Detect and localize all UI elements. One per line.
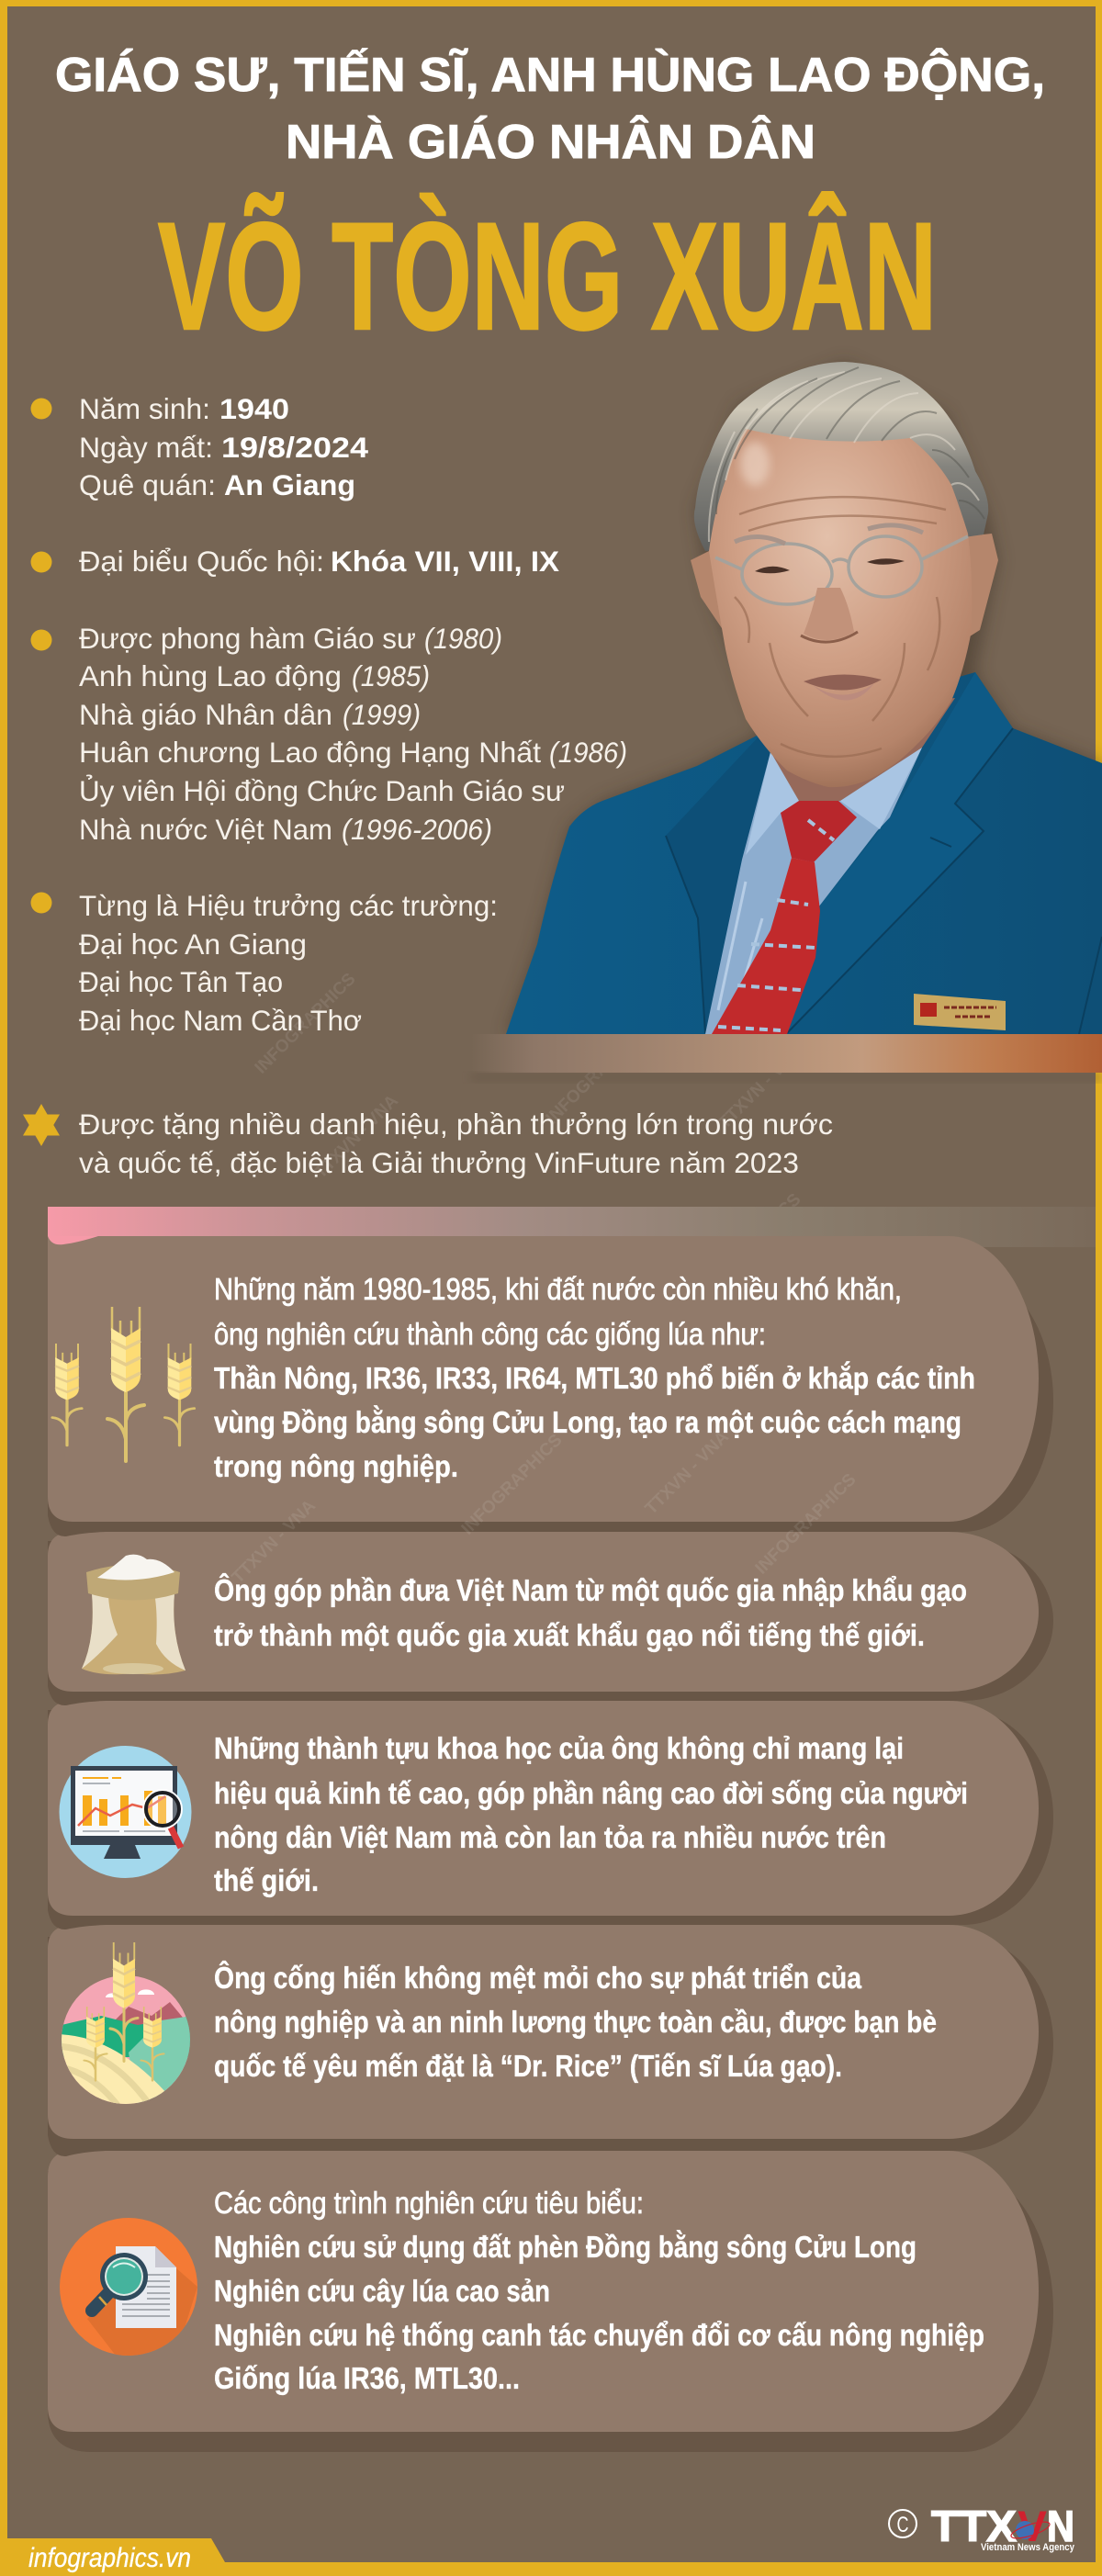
panel: rice export — [48, 1532, 1053, 1705]
text: rice varieties: Thần Nông, IR36, IR33, IR64, MTL30 phổ biến ở khắp các tỉnh — [214, 1361, 975, 1395]
bullet: rector roles: Đại học Tân Tạo — [79, 965, 283, 998]
text: research works — [214, 2186, 984, 2395]
glasses — [715, 536, 968, 604]
portrait photo — [506, 362, 1102, 1034]
hair strands — [709, 372, 979, 542]
bullet: personal details: 1940 — [219, 392, 289, 425]
bullet: titles and awards: Ủy viên Hội đồng Chức Danh Giáo sư — [79, 774, 565, 807]
text: rice export — [214, 1572, 967, 1652]
text: scientific achievements: nông dân Việt Nam mà còn lan tỏa ra nhiều nước trên — [214, 1820, 886, 1854]
text: research works: Giống lúa IR36, MTL30... — [214, 2361, 520, 2395]
bullet dot — [31, 399, 51, 419]
highlight: prizes: và quốc tế, đặc biệt là Giải thưởng VinFuture năm 2023 — [79, 1146, 799, 1179]
bullet: titles and awards: Nhà giáo Nhân dân — [79, 698, 332, 731]
logo: TTXVN: V — [1018, 2502, 1048, 2550]
text: rice varieties: Những năm 1980-1985, khi đất nước còn nhiều khó khăn, — [214, 1272, 902, 1306]
bullet: personal details: 19/8/2024 — [221, 431, 369, 464]
icon: star — [23, 1104, 60, 1146]
mouth — [804, 674, 882, 691]
bullet: national assembly: Khóa VII, VIII, IX — [331, 545, 559, 578]
bullet: rector roles: Đại học An Giang — [79, 928, 307, 961]
text: research works: Nghiên cứu sử dụng đất phèn Đồng bằng sông Cửu Long — [214, 2230, 916, 2264]
bullet: titles and awards: (1999) — [343, 698, 421, 731]
bullet: national assembly: Đại biểu Quốc hội: — [79, 545, 324, 578]
hair — [694, 362, 988, 551]
text: scientific achievements: thế giới. — [214, 1863, 319, 1897]
highlight: prizes: Được tặng nhiều danh hiệu, phần thưởng lớn trong nước — [79, 1108, 833, 1141]
watermarks over panels: TTXVN - VNA — [229, 1496, 320, 1588]
text: rice varieties: ông nghiên cứu thành công các giống lúa như: — [214, 1317, 766, 1351]
lapels — [666, 733, 770, 1034]
watermarks over panels: TTXVN - VNA — [642, 1427, 733, 1519]
text: research works: Nghiên cứu hệ thống canh tác chuyển đổi cơ cấu nông nghiệp — [214, 2318, 984, 2352]
text: Dr. Rice: quốc tế yêu mến đặt là “Dr. Rice” (Tiến sĩ Lúa gạo). — [214, 2049, 842, 2083]
name badge — [914, 994, 1006, 1030]
watermarks: TTXVN - VNA — [311, 1091, 402, 1183]
watermarks: TTXVN - VNA — [486, 1262, 577, 1354]
text: rice varieties: vùng Đồng bằng sông Cửu Long, tạo ra một cuộc cách mạng — [214, 1405, 961, 1439]
bullet: titles and awards: (1986) — [549, 736, 627, 769]
bullet: rector roles: Đại học Nam Cần Thơ — [79, 1004, 362, 1037]
icon: rice sack — [82, 1555, 186, 1674]
bullet: personal details: Ngày mất: — [79, 431, 213, 464]
logo: TTXVN — [889, 2502, 1075, 2553]
bullet: titles and awards: (1985) — [352, 659, 430, 692]
text: rice varieties — [214, 1272, 975, 1483]
footer tab: website: infographics.vn — [28, 2543, 191, 2573]
text: Dr. Rice: Ông cống hiến không mệt mỏi cho sự phát triển của — [214, 1960, 862, 1995]
watermarks: INFOGRAPHICS — [543, 1020, 651, 1129]
title: honorifics: GIÁO SƯ, TIẾN SĨ, ANH HÙNG LAO ĐỘNG, — [55, 48, 1045, 102]
watermarks: INFOGRAPHICS — [697, 1190, 805, 1299]
bullet: titles and awards: Huân chương Lao động Hạng Nhất — [79, 736, 541, 769]
bullet: titles and awards: Anh hùng Lao động — [79, 659, 342, 692]
nose — [804, 588, 854, 640]
bullet: personal details: An Giang — [224, 468, 355, 501]
photo shadow — [506, 362, 1102, 1034]
watermarks over panels: INFOGRAPHICS — [752, 1470, 860, 1579]
text: research works: Các công trình nghiên cứu tiêu biểu: — [214, 2186, 644, 2220]
bullet: personal details — [31, 392, 369, 501]
tie — [712, 801, 857, 1034]
text: research works: Nghiên cứu cây lúa cao sản — [214, 2274, 550, 2308]
icon: rice field — [55, 1942, 193, 2108]
pink ribbon — [48, 1207, 1096, 1247]
wrinkles and face shading — [735, 497, 946, 757]
shirt collar — [746, 748, 922, 855]
bullet: titles and awards: (1996-2006) — [342, 813, 492, 846]
neck — [772, 698, 955, 801]
bullet: titles and awards: Được phong hàm Giáo sư — [79, 622, 416, 655]
text: Dr. Rice — [214, 1960, 937, 2083]
bullet: titles and awards: (1980) — [424, 622, 502, 655]
bullet: personal details: Năm sinh: — [79, 392, 210, 425]
gradient band under portrait — [471, 1034, 1102, 1082]
bullet: titles and awards — [31, 622, 627, 846]
footer tab: website — [0, 2538, 1096, 2576]
text: Dr. Rice: nông nghiệp và an ninh lương thực toàn cầu, được bạn bè — [214, 2005, 937, 2039]
bullet dot — [31, 551, 51, 573]
text: rice varieties: trong nông nghiệp. — [214, 1449, 458, 1483]
ears — [691, 534, 998, 643]
globe — [1009, 2518, 1051, 2542]
eyebrows — [735, 525, 923, 544]
bullet dot — [31, 630, 51, 650]
icon: document and magnifier — [60, 2218, 197, 2360]
eyes — [755, 558, 905, 573]
watermarks — [252, 970, 806, 1354]
text: scientific achievements: hiệu quả kinh tế cao, góp phần nâng cao đời sống của người — [214, 1776, 968, 1810]
bullet: rector roles — [31, 889, 498, 1037]
logo: TTXVN: N — [1047, 2502, 1074, 2550]
panel: rice varieties — [48, 1231, 1053, 1536]
bullet: personal details: Quê quán: — [79, 468, 216, 501]
panel: Dr. Rice — [48, 1925, 1053, 2156]
forehead highlight — [740, 442, 770, 486]
text: rice export: trở thành một quốc gia xuất khẩu gạo nổi tiếng thế giới. — [214, 1618, 925, 1652]
copyright mark — [889, 2510, 916, 2537]
bullet dot — [31, 893, 51, 913]
bullet: rector roles: Từng là Hiệu trưởng các trường: — [79, 889, 498, 922]
shirt — [705, 748, 922, 1034]
title: honorifics — [55, 48, 1045, 169]
bullet: titles and awards: Nhà nước Việt Nam — [79, 813, 332, 846]
watermarks: INFOGRAPHICS — [252, 970, 360, 1078]
title: honorifics: NHÀ GIÁO NHÂN DÂN — [286, 115, 815, 169]
watermarks over panels — [229, 1427, 860, 1588]
highlight: prizes — [23, 1104, 833, 1179]
icon: chart monitor — [59, 1746, 191, 1878]
text: scientific achievements — [214, 1731, 968, 1897]
text: scientific achievements: Những thành tựu khoa học của ông không chỉ mang lại — [214, 1731, 904, 1765]
bullet: national assembly — [31, 545, 559, 578]
logo: TTXVN: TTX — [931, 2502, 1017, 2550]
suit jacket — [506, 672, 1102, 1034]
panel: scientific achievements — [48, 1701, 1053, 1929]
icon: wheat stalks — [52, 1307, 195, 1461]
copyright mark: C — [896, 2513, 909, 2537]
watermarks: TTXVN - VNA — [715, 1041, 806, 1133]
ribbon tip — [48, 1231, 98, 1244]
text: rice export: Ông góp phần đưa Việt Nam từ một quốc gia nhập khẩu gạo — [214, 1572, 967, 1607]
watermarks over panels: INFOGRAPHICS — [458, 1431, 567, 1539]
logo: TTXVN: Vietnam News Agency — [981, 2542, 1075, 2553]
panel: research works — [48, 2151, 1053, 2452]
face — [709, 429, 972, 787]
